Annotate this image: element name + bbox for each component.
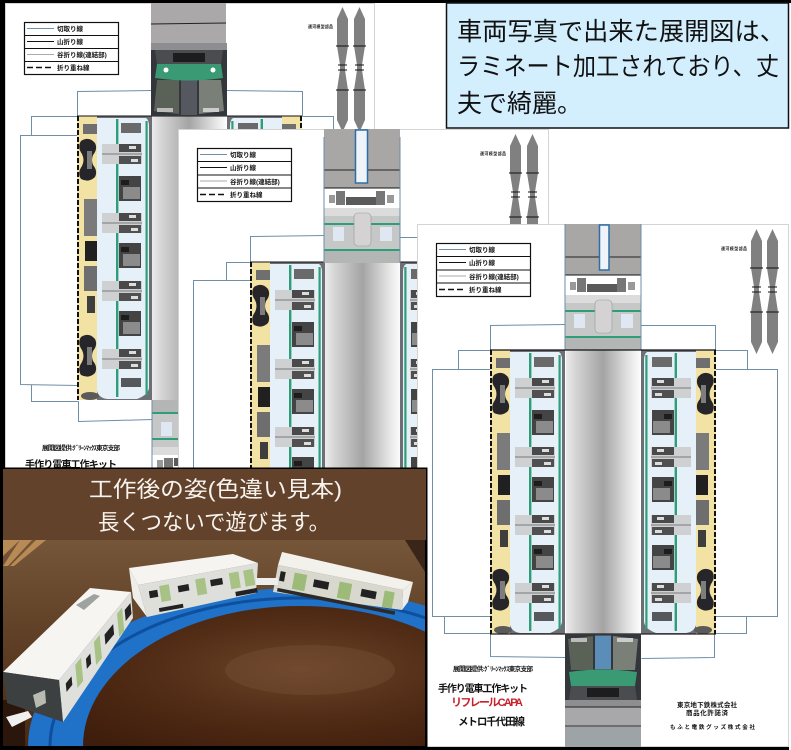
photo heading xyxy=(3,469,426,540)
sheet 3 left car side xyxy=(490,350,565,634)
sheet 3: front development sheet xyxy=(418,224,788,747)
sheet 1 legend: 折り重ね線 xyxy=(57,63,90,72)
toy car 2 xyxy=(129,554,278,617)
callout: laminated sheet note: 車両写真で出来た展開図は、 xyxy=(457,18,785,46)
sheet 2 end panel xyxy=(324,129,400,263)
sheet 3 parts strips xyxy=(750,229,779,354)
sheet 1: rear development sheet xyxy=(6,3,374,526)
callout: laminated sheet note: 夫で綺麗。 xyxy=(457,90,582,118)
sheet 1 glue tabs xyxy=(20,90,334,422)
sheet 3 kit title: メトロ千代田線 xyxy=(458,715,526,728)
sheet 3 right car side xyxy=(641,350,716,634)
toy track xyxy=(3,588,425,746)
photo heading: 長くつないで遊びます。 xyxy=(98,510,330,535)
callout: laminated sheet note xyxy=(446,3,788,128)
sheet 3 end panel xyxy=(490,224,716,634)
sheet 3 legend: 山折り線 xyxy=(469,258,496,267)
sheet 3 legend: 折り重ね線 xyxy=(469,285,502,294)
sheet 3 company credits xyxy=(670,700,755,731)
sheet 3 kit title xyxy=(438,664,534,728)
sheet 1 credits xyxy=(25,443,120,471)
toy car 1 xyxy=(3,588,133,727)
sheet 1 end panel xyxy=(152,400,228,526)
photo heading: 工作後の姿(色違い見本) xyxy=(89,477,342,502)
sheet 2 legend xyxy=(197,148,292,202)
sheet 3 small note: 運河模型部品 xyxy=(721,245,747,251)
sheet 2: middle development sheet xyxy=(178,129,549,468)
sheet 3 front of train xyxy=(565,634,641,747)
photo panel: assembled paper trains xyxy=(3,468,428,747)
sheet 1 legend: 谷折り線(連結部) xyxy=(57,50,107,59)
sheet 1 legend: 切取り線 xyxy=(57,24,84,33)
sheet 3 legend: 谷折り線(連結部) xyxy=(469,272,519,281)
sheet 1 front of train xyxy=(151,3,227,116)
sheet 2 parts strips xyxy=(509,134,539,259)
photo scene xyxy=(3,540,425,746)
sheet 2 glue tabs xyxy=(194,236,430,468)
sheet 3 roof xyxy=(566,350,640,634)
sheet 2 legend: 谷折り線(連結部) xyxy=(230,177,280,186)
sheet 1 credits: 手作り電車工作キット xyxy=(25,458,117,471)
sheet 1 legend: 山折り線 xyxy=(57,37,84,46)
sheet 3 legend xyxy=(436,244,530,296)
sheet 3 kit title: リフレールCAPA xyxy=(451,697,523,709)
sheet 3 company credits: 東京地下鉄株式会社 xyxy=(677,700,738,709)
sheet 3 kit title: 展開図提供:ｸﾞﾘｰﾝﾏｯｸｽ東京支部 xyxy=(453,664,534,673)
sheet 3 company credits: もふと電鉄グッズ株式会社 xyxy=(670,723,755,731)
sheet 1 small note: 運河模型部品 xyxy=(308,23,333,29)
sheet 1 parts strips xyxy=(336,7,366,132)
toy car 3 xyxy=(273,552,413,615)
sheet 2 car body xyxy=(250,262,417,468)
sheet 3 legend: 切取り線 xyxy=(469,245,496,254)
sheet 3 company credits: 商品化許諾済 xyxy=(686,708,728,717)
sheet 2 legend: 山折り線 xyxy=(230,163,256,172)
sheet 2 legend: 切取り線 xyxy=(230,150,256,159)
sheet 2 small note: 運河模型部品 xyxy=(480,150,506,156)
sheet 2 legend: 折り重ね線 xyxy=(230,190,263,199)
sheet 3 kit title: 手作り電車工作キット xyxy=(438,682,528,695)
sheet 3 glue tabs xyxy=(432,324,778,658)
sheet 1 legend xyxy=(24,22,118,74)
sheet 1 car body xyxy=(77,116,302,400)
sheet 1 credits: 展開図提供:ｸﾞﾘｰﾝﾏｯｸｽ東京支部 xyxy=(42,443,120,452)
